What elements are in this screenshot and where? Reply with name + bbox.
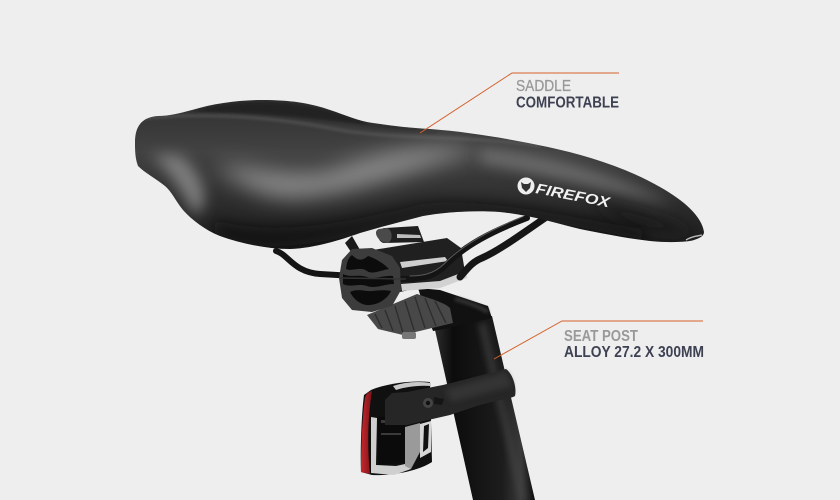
ribbed lower clamp pad (367, 294, 453, 339)
upper bolt barrel (345, 226, 424, 258)
saddle clamp block (373, 238, 467, 292)
rear reflector light (361, 381, 432, 475)
callout: saddle: COMFORTABLE (516, 94, 619, 112)
callout: seat post: ALLOY 27.2 X 300MM (564, 344, 704, 361)
product illustration with callouts (135, 72, 704, 500)
brand logo (518, 178, 612, 212)
callout: seat post (494, 321, 704, 361)
seat post (435, 316, 535, 500)
callout: saddle (420, 73, 619, 133)
ribbed clamp disc (339, 248, 406, 312)
post head (418, 288, 492, 331)
brand name: FIREFOX (534, 181, 612, 212)
clamp band on seat post (385, 369, 516, 425)
saddle rails (276, 217, 545, 279)
callout: saddle: SADDLE (516, 78, 571, 95)
saddle shading (145, 102, 702, 246)
callout: seat post: SEAT POST (564, 328, 638, 345)
saddle (135, 100, 704, 249)
